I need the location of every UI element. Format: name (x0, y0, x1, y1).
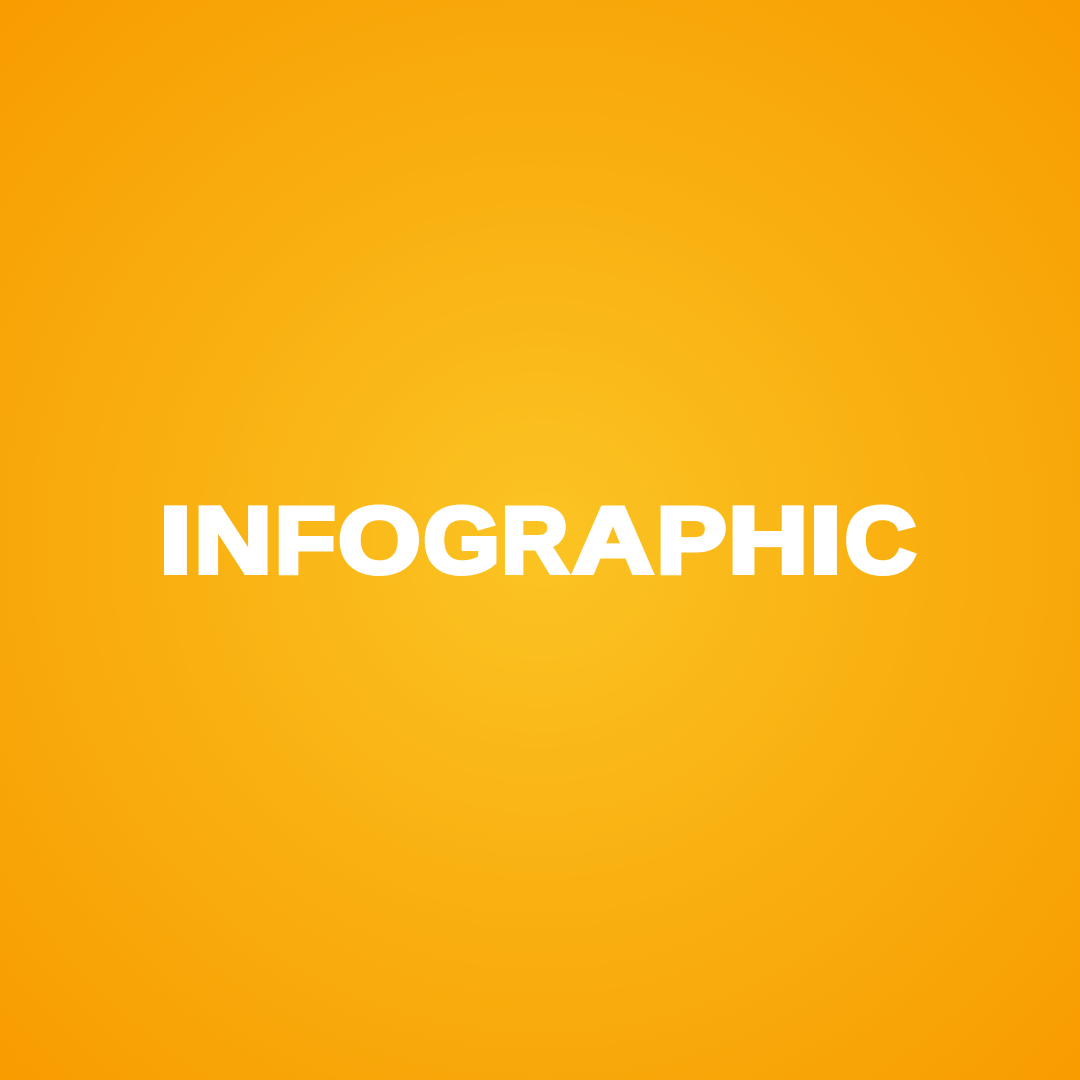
title: O (338, 488, 421, 592)
title: N (194, 488, 272, 592)
title: I (809, 488, 842, 592)
title: F (275, 488, 336, 592)
title: A (572, 488, 654, 592)
title: R (501, 488, 568, 592)
title: H (728, 488, 808, 592)
title: I (159, 488, 192, 592)
title: P (656, 488, 726, 592)
title: G (423, 488, 500, 592)
title: C (845, 488, 916, 592)
